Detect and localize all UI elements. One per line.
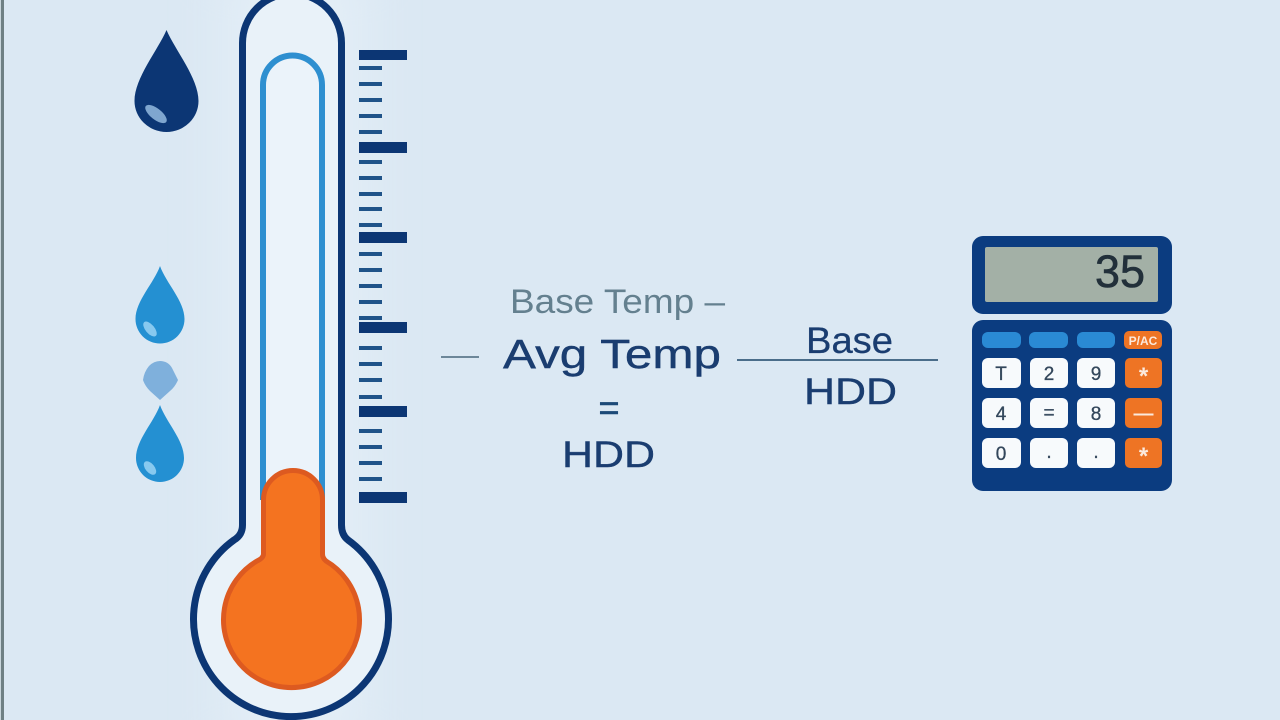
calculator number keys [982,358,1115,468]
calculator number key labels: T [995,364,1007,385]
thermometer glass outline [193,0,388,717]
formula: leading dash [441,356,479,358]
calculator function keys: P/AC [1129,334,1158,348]
icon: blue water drop [136,266,184,344]
formula: HDD result: HDD [562,434,655,475]
formula: base temp label: Base Temp – [510,283,725,321]
fraction: numerator base: Base [806,320,893,361]
thermometer [193,0,388,717]
calculator number key labels: 4 [996,404,1007,425]
calculator screen [985,247,1158,302]
icon: dark water drop [134,30,198,132]
calculator number key labels: = [1043,403,1055,424]
thermometer inner tube [263,56,322,500]
fraction: divider line [737,359,938,361]
calculator [972,236,1172,491]
calculator number key labels [995,364,1101,465]
calculator operator keys [1125,358,1162,470]
calculator operator keys: * [1139,443,1149,470]
thermometer orange mercury [224,470,360,688]
calculator operator keys: — [1134,403,1154,425]
formula: equals sign: = [598,387,620,428]
calculator function keys [982,331,1162,349]
calculator number key labels: 9 [1091,364,1101,385]
fraction: denominator HDD: HDD [804,371,897,412]
calculator number key labels: 2 [1044,364,1054,385]
calculator display housing [972,236,1172,314]
thermometer scale ticks [359,50,407,503]
calculator number key labels: 8 [1091,404,1101,425]
formula [441,283,938,475]
icon: pale diamond droplet [143,361,178,400]
calculator number key labels: 0 [996,444,1006,465]
calculator keypad body [972,320,1172,491]
calculator operator keys: * [1139,363,1149,390]
icon: lower blue water drop [136,405,184,482]
calculator number key labels: . [1046,442,1052,463]
formula: avg temp label: Avg Temp [503,331,721,377]
calculator number key labels: . [1093,442,1099,463]
calculator readout: 35 [1095,246,1145,297]
